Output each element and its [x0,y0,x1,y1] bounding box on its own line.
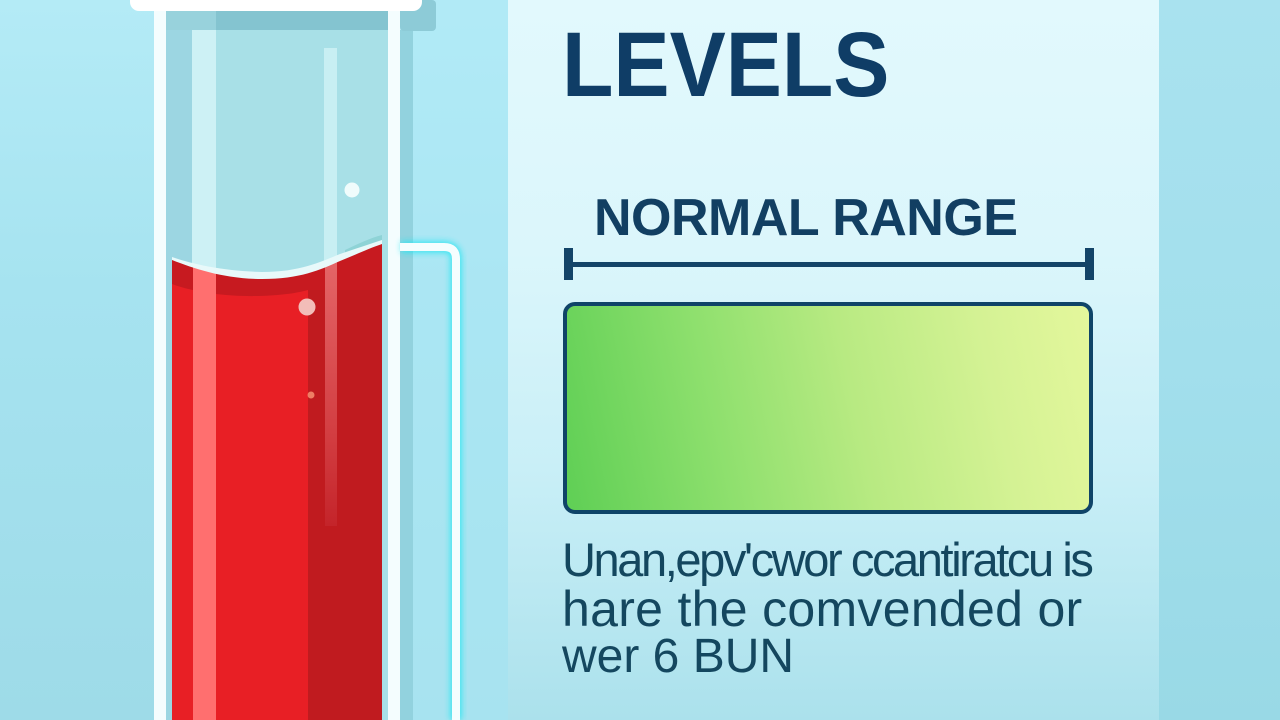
panel: text background [508,0,1159,720]
soft area right of tube [412,0,508,720]
glass left shade [166,0,192,720]
text block: description [562,533,1092,683]
meniscus teal shade [345,235,382,256]
green range bar [563,302,1093,514]
glass interior [166,0,388,720]
blood base [172,284,308,720]
blood [172,240,382,720]
blood dark right column [308,290,382,720]
range bracket [564,248,1094,280]
tube highlight left [192,30,216,280]
text block: description: hare the comvended or [562,581,1083,637]
bracket glow [401,247,456,720]
heading: normal range: NORMAL RANGE [594,189,1017,247]
bubble upper [344,182,360,198]
bubble in blood [298,298,316,316]
glass top band [216,10,388,30]
tube left wall [154,0,166,720]
tube cap [130,0,422,11]
blood thin highlight [325,240,337,526]
blood pale highlight [193,240,216,720]
illustration: blood test tube [130,0,508,720]
bracket line [400,247,456,720]
glass top band left part [166,10,216,30]
text block: description: Unan,epv'cwor ccantiratcu is [562,533,1092,586]
blood dark surface band [172,260,308,296]
tube right wall [388,0,400,720]
cap shadow [400,0,436,31]
panel: right edge strip [1159,0,1280,720]
tube shadow on the right [400,30,413,720]
title: LEVELS [562,14,889,116]
tube highlight right [324,48,337,263]
text block: description: wer 6 BUN [562,630,794,683]
meniscus band [172,240,382,279]
bubble small [308,392,314,398]
